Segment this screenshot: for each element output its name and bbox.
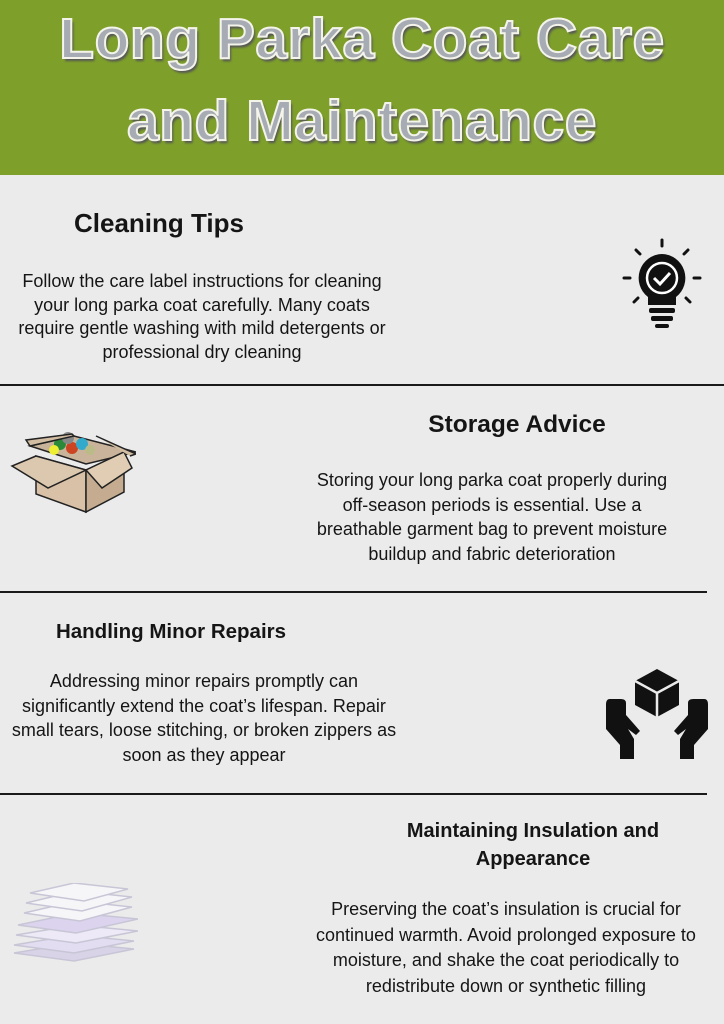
title: Long Parka Coat Care [59, 7, 665, 71]
header banner [0, 0, 724, 175]
heading: storage advice: Storage Advice [428, 411, 606, 438]
panel: maintaining insulation [14, 820, 696, 996]
text: insulation: redistribute down or synthetic filling [366, 976, 646, 996]
text: repairs: Addressing minor repairs promptly can [50, 671, 358, 691]
icon: stacked insulation sheets [14, 883, 138, 962]
text: repairs: small tears, loose stitching, or broken zippers as [12, 720, 396, 740]
text: insulation [316, 899, 696, 996]
panel: handling minor repairs [12, 620, 708, 765]
heading: repairs: Handling Minor Repairs [56, 620, 286, 643]
text: storage: Storing your long parka coat properly during [317, 470, 667, 490]
icon: hands holding box [606, 669, 708, 759]
text: cleaning [18, 271, 386, 362]
text: storage [317, 470, 667, 564]
text: cleaning: professional dry cleaning [102, 342, 302, 362]
icon: cardboard box [10, 432, 136, 514]
icon: light bulb with check [622, 238, 702, 328]
text: cleaning: require gentle washing with mild detergents or [18, 318, 386, 338]
text: storage: breathable garment bag to prevent moisture [317, 519, 667, 539]
title: and Maintenance [127, 89, 597, 153]
text: insulation: Preserving the coat’s insulation is crucial for [331, 899, 681, 919]
text: repairs [12, 671, 396, 765]
text: insulation: continued warmth. Avoid prolonged exposure to [316, 924, 696, 944]
heading: insulation [407, 820, 659, 870]
text: insulation: moisture, and shake the coat periodically to [333, 950, 679, 970]
text: repairs: soon as they appear [122, 744, 286, 764]
text: storage: buildup and fabric deterioration [368, 544, 616, 564]
text: cleaning: Follow the care label instructions for cleaning [22, 271, 382, 291]
title [59, 7, 666, 153]
text: cleaning: your long parka coat carefully. Many coats [34, 294, 370, 314]
text: repairs: significantly extend the coat’s lifespan. Repair [22, 696, 386, 716]
panel: storage advice [10, 411, 667, 564]
heading: cleaning tips: Cleaning Tips [74, 208, 244, 238]
text: storage: off-season periods is essential. Use a [343, 494, 641, 514]
heading: insulation: Maintaining Insulation and [407, 820, 659, 842]
heading: insulation: Appearance [476, 848, 590, 870]
panel: cleaning tips [18, 208, 702, 362]
